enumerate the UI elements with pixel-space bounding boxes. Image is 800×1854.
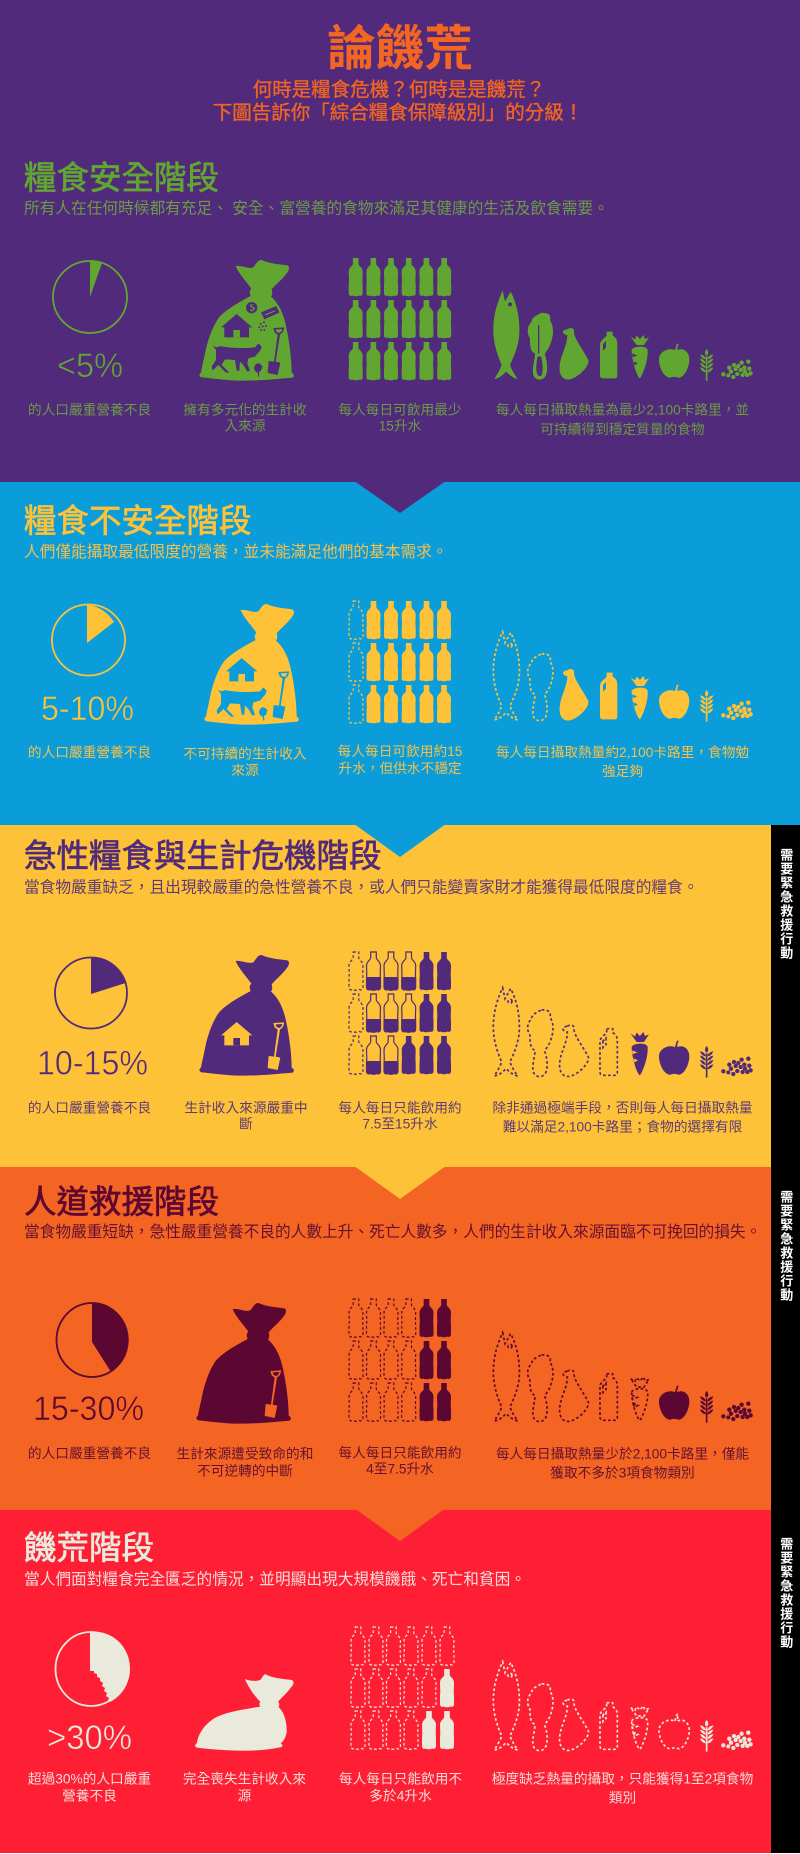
icon: water bottles <box>349 1299 451 1421</box>
caption: livelihoods <box>184 1100 308 1132</box>
caption: water: 每人每日可飲用約15 <box>338 744 463 759</box>
subtitle: 下圖告訴你「綜合糧食保障級別」的分級！ <box>213 102 583 124</box>
caption: water: 每人每日可飲用最少 <box>338 402 462 418</box>
description: 當人們面對糧食完全匱乏的情況，並明顯出現大規模饑餓、死亡和貧困。 <box>24 1570 526 1588</box>
description: 當食物嚴重缺乏，且出現較嚴重的急性營養不良，或人們只能變賣家財才能獲得最低限度的糧食。 <box>24 878 699 896</box>
caption: livelihoods <box>183 746 307 778</box>
percentage: 15-30% <box>33 1390 144 1428</box>
caption: malnutrition: 的人口嚴重營養不良 <box>28 1100 151 1116</box>
caption: food <box>492 1100 753 1134</box>
description: 所有人在任何時候都有充足、 安全、富營養的食物來滿足其健康的生活及飲食需要。 <box>24 200 609 218</box>
percentage: >30% <box>47 1719 132 1757</box>
icon: food groups <box>493 1662 753 1752</box>
caption: water: 15升水 <box>379 418 422 434</box>
sidebar label: crisis: 需要緊急救援行動 <box>778 848 793 960</box>
arrow <box>356 1167 444 1199</box>
caption: water <box>338 402 462 434</box>
caption: livelihoods: 生計收入來源嚴重中 <box>184 1100 308 1116</box>
sidebar label: famine: 需要緊急救援行動 <box>778 1537 793 1649</box>
caption: water: 每人每日只能飲用約 <box>338 1100 462 1116</box>
panel: humanitarian emergency stage <box>0 1167 771 1510</box>
caption: food: 每人每日攝取熱量少於2,100卡路里，僅能 <box>496 1446 749 1462</box>
icon: water bottles <box>351 1627 454 1749</box>
caption: water: 多於4升水 <box>369 1788 432 1804</box>
pie chart: 10-15 percent <box>55 958 127 1028</box>
caption: food: 每人每日攝取熱量為最少2,100卡路里，並 <box>496 402 749 418</box>
caption: food <box>496 744 749 779</box>
caption: livelihoods <box>177 1446 313 1478</box>
caption: livelihoods <box>183 1772 306 1804</box>
caption: water: 每人每日只能飲用約 <box>338 1446 462 1460</box>
description: 當食物嚴重短缺，急性嚴重營養不良的人數上升、死亡人數多，人們的生計收入來源面臨不可挽回的損失。 <box>24 1223 761 1241</box>
caption: malnutrition: 的人口嚴重營養不良 <box>28 1446 151 1461</box>
caption: water <box>338 744 463 776</box>
caption: livelihoods: 源 <box>238 1788 252 1804</box>
caption: livelihoods: 擁有多元化的生計收 <box>183 402 307 418</box>
panel: food security stage <box>0 0 800 482</box>
caption: food: 極度缺乏熱量的攝取，只能獲得1至2項食物 <box>492 1770 754 1786</box>
pie chart: 5-10 percent <box>52 604 125 676</box>
caption: livelihoods: 入來源 <box>224 418 266 434</box>
caption: malnutrition: 超過30%的人口嚴重 <box>28 1772 151 1786</box>
caption: livelihoods: 不可逆轉的中斷 <box>197 1464 293 1478</box>
heading: 糧食不安全階段 <box>24 503 252 539</box>
caption: food <box>492 1770 754 1806</box>
pie chart: over 30 percent <box>56 1632 130 1706</box>
icon: sack with diversified livelihoods <box>199 260 294 381</box>
pie chart: 15-30 percent <box>56 1303 129 1377</box>
icon: food groups <box>493 291 753 381</box>
caption: livelihoods: 生計來源遭受致命的和 <box>177 1446 313 1462</box>
icon: food groups <box>493 988 753 1078</box>
percentage: <5% <box>57 347 123 385</box>
sidebar label: emergency: 需要緊急救援行動 <box>778 1190 793 1302</box>
panel: food insecurity stage <box>0 482 800 825</box>
caption: malnutrition: 的人口嚴重營養不良 <box>28 402 151 418</box>
caption: water: 升水，但供水不穩定 <box>338 761 462 776</box>
heading: 人道救援階段 <box>24 1184 219 1220</box>
caption: food: 除非通過極端手段，否則每人每日攝取熱量 <box>492 1100 753 1116</box>
icon: water bottles <box>349 952 451 1074</box>
subtitle <box>213 79 583 124</box>
caption: food: 強足夠 <box>602 764 643 779</box>
caption: food: 類別 <box>609 1790 636 1806</box>
caption: malnutrition <box>28 1772 151 1804</box>
caption: livelihoods: 不可持續的生計收入 <box>183 746 307 762</box>
caption: water <box>338 1446 462 1476</box>
caption: water: 4至7.5升水 <box>366 1462 434 1476</box>
caption: food <box>496 402 749 437</box>
percentage: 10-15% <box>37 1044 148 1082</box>
caption: livelihoods <box>183 402 307 434</box>
caption: food: 獲取不多於3項食物類別 <box>550 1464 695 1480</box>
caption: water: 7.5至15升水 <box>362 1116 438 1132</box>
caption: food <box>496 1446 749 1480</box>
heading: 饑荒階段 <box>24 1530 154 1566</box>
caption: water: 每人每日只能飲用不 <box>339 1772 462 1786</box>
heading: 糧食安全階段 <box>24 160 219 196</box>
arrow <box>356 825 444 857</box>
panel: acute food and livelihood crisis stage <box>0 825 771 1167</box>
description: 人們僅能攝取最低限度的營養，並未能滿足他們的基本需求。 <box>24 542 448 561</box>
arrow <box>357 1510 443 1541</box>
caption: livelihoods: 斷 <box>239 1116 253 1132</box>
title: 論饑荒 <box>327 22 473 76</box>
caption: malnutrition: 的人口嚴重營養不良 <box>28 745 151 760</box>
icon: food groups <box>493 1333 753 1423</box>
panel: famine stage <box>0 1510 771 1853</box>
icon: sack with unsustainable livelihoods <box>204 604 299 725</box>
icon: food groups <box>493 632 753 722</box>
percentage: 5-10% <box>41 690 134 728</box>
icon: water bottles <box>349 601 451 723</box>
caption: malnutrition: 營養不良 <box>62 1788 117 1804</box>
caption: food: 難以滿足2,100卡路里；食物的選擇有限 <box>503 1118 743 1134</box>
caption: water <box>339 1772 462 1804</box>
icon: empty sack <box>195 1674 294 1751</box>
caption: food: 每人每日攝取熱量約2,100卡路里，食物勉 <box>496 744 749 760</box>
arrow <box>356 482 444 513</box>
caption: livelihoods: 來源 <box>231 763 259 778</box>
caption: water <box>338 1100 462 1132</box>
icon: sack with lost livelihoods <box>196 1303 291 1424</box>
icon: water bottles <box>349 258 451 380</box>
heading: 急性糧食與生計危機階段 <box>24 838 382 874</box>
pie chart: under 5 percent <box>53 260 127 333</box>
caption: food: 可持續得到穩定質量的食物 <box>540 421 705 437</box>
subtitle: 何時是糧食危機？何時是是饑荒？ <box>253 79 545 101</box>
sidebar: urgent action required <box>771 825 800 1853</box>
caption: livelihoods: 完全喪失生計收入來 <box>183 1772 306 1786</box>
icon: sack with disrupted livelihoods <box>199 955 294 1076</box>
